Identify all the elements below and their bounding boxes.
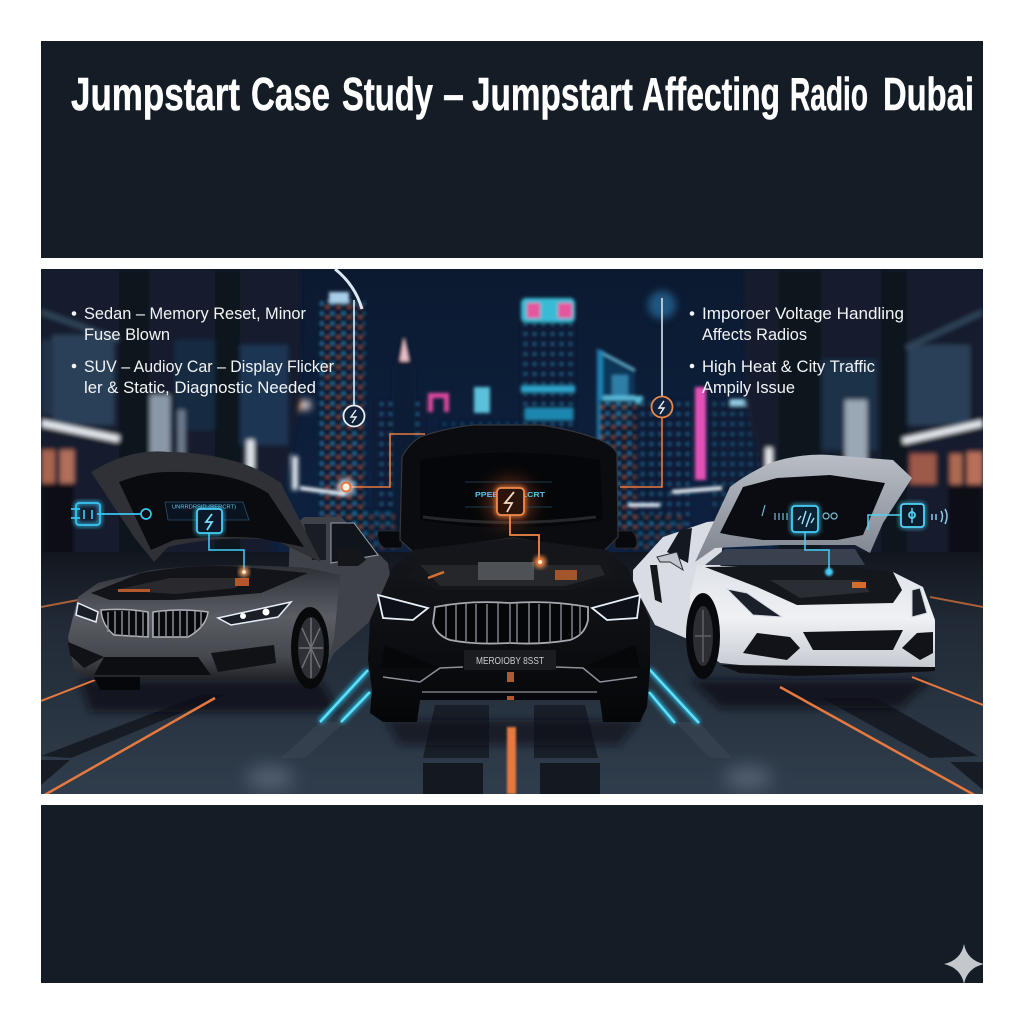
right building: [745, 269, 983, 560]
text block: left bullets: ler & Static, Diagnostic Needed: [84, 379, 316, 397]
title: Study: [342, 68, 433, 120]
title: Radio: [790, 68, 868, 120]
left building: [41, 269, 300, 560]
title: Case: [251, 68, 330, 120]
icon: center orange lightning box: [497, 488, 546, 568]
text block: left bullets: [72, 305, 334, 397]
display: center car: PPEBDIGT LCRT: [475, 490, 545, 499]
panel: title band: [41, 41, 983, 258]
center car: black SUV: [368, 425, 650, 722]
license plate: [464, 650, 556, 670]
panel: bottom band: [41, 805, 983, 983]
display: left car: UNRRDRSID (RERCRT): [172, 504, 236, 510]
orange floor lines: [41, 597, 983, 797]
floor cyan lines: [320, 669, 699, 723]
text block: right bullets: High Heat & City Traffic: [702, 358, 875, 376]
icon: left module and connector: [71, 503, 151, 525]
text block: right bullets: Ampily Issue: [702, 379, 795, 397]
text block: right bullets: Affects Radios: [702, 326, 807, 344]
connector: left callout white line and bolt: [344, 300, 364, 426]
text block: left bullets: SUV – Audioy Car – Display Flicker: [84, 358, 334, 376]
text block: right bullets: Imporoer Voltage Handling: [702, 305, 904, 323]
city towers: [320, 292, 788, 540]
left tower highlight: [335, 269, 362, 309]
title: Dubai: [883, 68, 974, 120]
display: right car: [762, 505, 837, 520]
display: left car: [165, 502, 249, 520]
right car: white sports car: [633, 455, 935, 679]
icon: sparkle star: [944, 944, 984, 984]
text block: left bullets: Fuse Blown: [84, 326, 170, 344]
text block: right bullets: [690, 305, 904, 397]
title: –: [443, 68, 464, 120]
connector: right callout line and bolt: [620, 298, 672, 487]
title: Jumpstart: [472, 68, 633, 120]
left car: grey sedan: [68, 451, 392, 690]
center glow: [488, 480, 532, 524]
text block: left bullets: Sedan – Memory Reset, Minor: [84, 305, 306, 323]
display: center car: [465, 482, 552, 507]
road floor: [41, 552, 983, 794]
license plate: MEROIOBY 8SST: [476, 655, 544, 667]
icon: left car lightning box: [197, 509, 249, 577]
icon: right module with signal waves: [868, 504, 947, 530]
title: Affecting: [642, 68, 780, 120]
panel: city scene with three cars: [41, 269, 983, 797]
connector: orange line from node to center hood: [337, 434, 425, 496]
title: Jumpstart: [71, 68, 240, 120]
icon: right car waveform box: [792, 506, 833, 576]
